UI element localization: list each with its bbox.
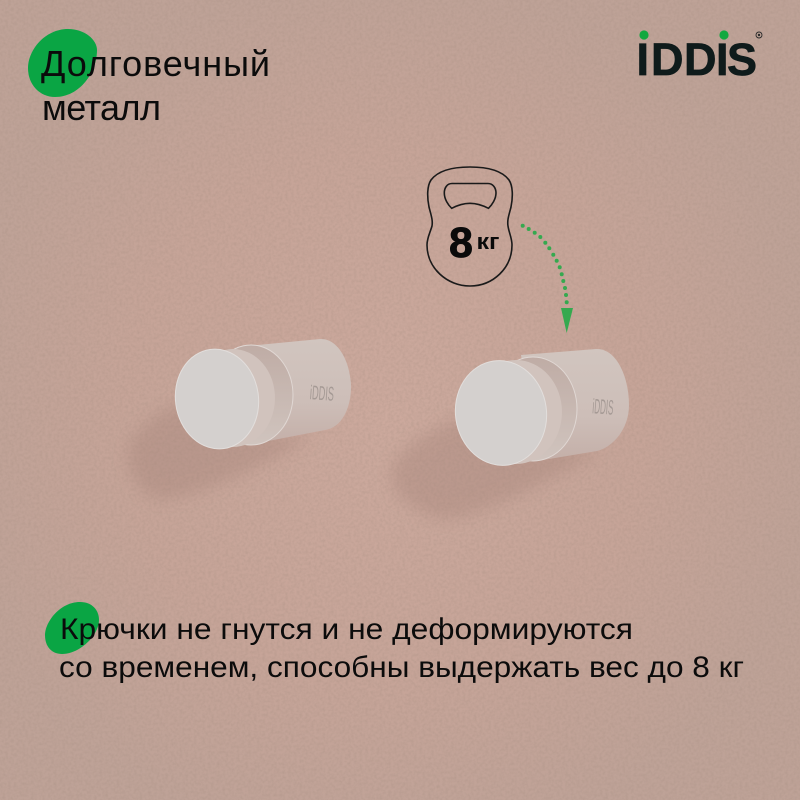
icon: kettlebell 8 kg xyxy=(427,167,512,286)
hook neck xyxy=(191,349,275,447)
icon: green blob behind description xyxy=(45,602,99,654)
arrow: dotted green arrow to hook xyxy=(521,224,573,333)
hook: right: iDDIS xyxy=(592,395,614,420)
hook cylinder body xyxy=(237,339,351,444)
hook: right xyxy=(391,349,629,519)
hook cylinder body xyxy=(521,349,629,461)
hook groove xyxy=(209,345,293,445)
hook: left xyxy=(128,339,351,499)
heading with green blob xyxy=(28,29,270,128)
hook shadow xyxy=(391,418,601,519)
icon: kettlebell 8 kg: 8 xyxy=(449,219,473,267)
logo: IDDIS: IDDIS xyxy=(636,34,757,85)
hook face xyxy=(169,344,265,454)
description with green blob xyxy=(45,602,744,684)
description text: Крючки не гнутся и не деформируются xyxy=(60,613,633,646)
description text: со временем, способны выдержать вес до 8 кг xyxy=(59,651,744,684)
hook neck xyxy=(470,360,562,464)
hook shadow xyxy=(128,404,312,499)
hook face xyxy=(449,355,553,471)
hook groove xyxy=(489,357,577,461)
icon: green blob behind heading xyxy=(28,29,97,97)
heading: durable metal: металл xyxy=(42,87,161,128)
hook: left: iDDIS xyxy=(309,382,335,406)
heading: durable metal: Долговечный xyxy=(41,43,270,84)
icon: kettlebell 8 kg: кг xyxy=(476,229,500,254)
